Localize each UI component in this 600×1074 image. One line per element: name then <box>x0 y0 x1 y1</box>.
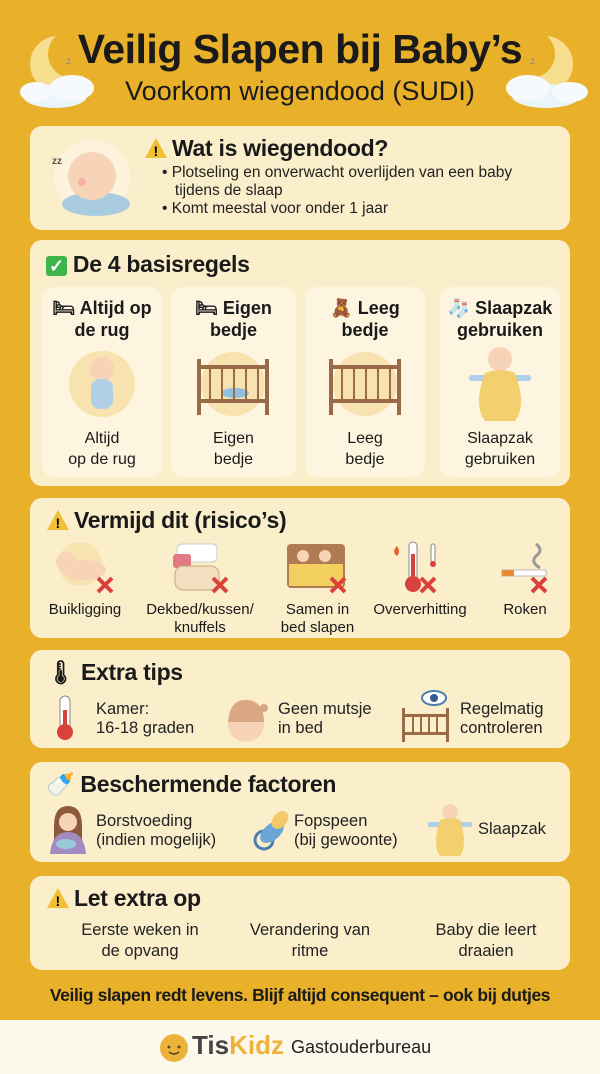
item 3 <box>436 921 536 960</box>
bullets: • Plotseling en onverwacht overlijden van een baby <box>162 164 512 181</box>
moon left <box>20 36 94 108</box>
card 2: bedje <box>214 451 253 468</box>
panel: basisregels <box>30 240 570 486</box>
heading: ! <box>154 143 158 159</box>
card 1: op de rug <box>68 451 136 468</box>
card 4: 🧦 Slaapzak <box>448 298 552 318</box>
heading: ! <box>56 893 60 909</box>
panel: vermijd dit <box>30 498 570 638</box>
item: samen in bed: Samen in <box>286 601 349 618</box>
bullets: • Komt meestal voor onder 1 jaar <box>162 200 388 217</box>
tip: controleren: Regelmatig <box>460 700 543 718</box>
card 2: 🛏 Eigen <box>195 298 272 318</box>
icon: empty crib <box>329 352 401 416</box>
item: oververhitting <box>373 542 467 618</box>
factor: borstvoeding: Borstvoeding <box>96 812 192 830</box>
factor: slaapzak <box>428 804 546 856</box>
logo <box>160 1030 431 1062</box>
card 1 <box>42 287 162 477</box>
panel: extra tips <box>30 650 570 748</box>
factor: fopspeen: Fopspeen <box>294 812 367 830</box>
item 3: draaien <box>458 942 514 960</box>
factor: slaapzak: Slaapzak <box>478 820 546 838</box>
tip: kamer <box>57 696 194 740</box>
item: dekbed <box>146 544 254 636</box>
card 1: 🛏 Altijd op <box>52 298 152 318</box>
card 1: de rug <box>74 320 130 340</box>
item: dekbed: Dekbed/kussen/ <box>146 601 254 618</box>
heading: Vermijd dit (risico’s) <box>74 507 286 533</box>
item 2 <box>250 921 370 960</box>
card 3: bedje <box>345 451 385 468</box>
item 1: Eerste weken in <box>81 921 199 939</box>
logo: Gastouderbureau <box>291 1037 431 1057</box>
tip: mutsje: Geen mutsje <box>278 700 372 718</box>
tip: kamer: Kamer: <box>96 700 149 718</box>
icon: baby on back <box>69 351 135 417</box>
item: oververhitting: Oververhitting <box>373 601 467 618</box>
card 3 <box>305 287 425 477</box>
moon right <box>506 36 588 108</box>
factor: borstvoeding <box>50 806 216 854</box>
icon: sleeping bag <box>469 347 531 421</box>
panel: beschermende factoren <box>30 762 570 862</box>
panel: let extra op <box>30 876 570 970</box>
card 1: Altijd <box>85 430 119 447</box>
item: roken: Roken <box>503 601 547 618</box>
tip: controleren: controleren <box>460 719 543 737</box>
item: buikligging <box>49 542 121 618</box>
item: roken <box>502 542 548 618</box>
item 3: Baby die leert <box>436 921 536 939</box>
panel: wat is wiegendood <box>30 126 570 230</box>
card 3: 🧸 Leeg <box>330 298 400 318</box>
card 4: Slaapzak <box>467 430 533 447</box>
card 2: bedje <box>210 320 257 340</box>
icon: sleeping baby <box>52 140 130 216</box>
item 1: de opvang <box>101 942 179 960</box>
card 4: gebruiken <box>465 451 535 468</box>
bullets <box>162 164 512 217</box>
heading: 🍼 Beschermende factoren <box>46 771 336 797</box>
icon: sleeping baby: zz <box>52 156 62 167</box>
item: samen in bed <box>281 544 354 636</box>
item 2: ritme <box>292 942 328 960</box>
card 2: Eigen <box>213 430 254 447</box>
tip: mutsje <box>228 700 372 742</box>
card 2 <box>171 287 296 477</box>
card 3: bedje <box>341 320 388 340</box>
item: samen in bed: bed slapen <box>281 619 354 636</box>
heading: Let extra op <box>74 885 201 911</box>
item 2: Verandering van <box>250 921 370 939</box>
factor: fopspeen <box>254 811 398 850</box>
heading: 🌡 Extra tips <box>46 659 183 685</box>
heading: Wat is wiegendood? <box>172 135 388 161</box>
factor: fopspeen: (bij gewoonte) <box>294 831 398 849</box>
icon: crib with baby <box>197 352 269 416</box>
footer slogan: Veilig slapen redt levens. Blijf altijd consequent – ook bij dutjes <box>50 985 550 1005</box>
heading: ✓ De 4 basisregels <box>49 251 250 277</box>
item 1 <box>81 921 199 960</box>
tip: controleren <box>402 690 543 742</box>
factor: borstvoeding: (indien mogelijk) <box>96 831 216 849</box>
card 4 <box>440 287 560 477</box>
moon left: z <box>66 56 71 67</box>
footer bar <box>0 1020 600 1074</box>
logo: TisKidz <box>192 1030 284 1060</box>
moon right: z <box>530 56 535 67</box>
tip: mutsje: in bed <box>278 719 323 737</box>
item: dekbed: knuffels <box>174 619 226 636</box>
heading: ! <box>56 515 60 531</box>
title: Veilig Slapen bij Baby’s <box>78 26 522 72</box>
bullets: tijdens de slaap <box>175 182 283 199</box>
card 4: gebruiken <box>457 320 543 340</box>
subtitle: Voorkom wiegendood (SUDI) <box>125 76 475 106</box>
card 3: Leeg <box>347 430 383 447</box>
tip: kamer: 16-18 graden <box>96 719 194 737</box>
item: buikligging: Buikligging <box>49 601 121 618</box>
